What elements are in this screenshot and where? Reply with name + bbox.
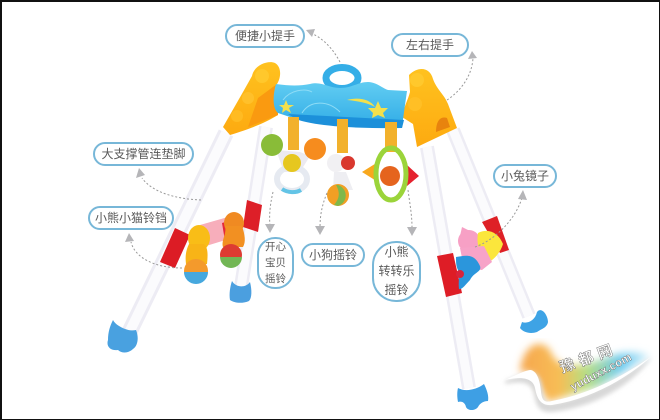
star left — [279, 100, 294, 113]
baby rattle toy — [261, 134, 326, 192]
arrow: left right handles — [447, 51, 477, 100]
label: convenient handle — [225, 24, 305, 48]
label: rabbit mirror: 小兔镜子 — [501, 168, 549, 182]
label: rabbit mirror — [493, 164, 557, 188]
arrow: convenient handle — [306, 29, 340, 62]
label: bear spinner rattle: 摇铃 — [384, 283, 408, 297]
bear and cat bell toys — [184, 212, 245, 284]
left front foot — [107, 320, 138, 353]
bar lower strip — [288, 114, 404, 128]
blue bar — [274, 82, 407, 128]
arrow: puppy rattle — [315, 193, 327, 235]
label: happy baby rattle — [257, 237, 294, 289]
handle — [326, 68, 358, 88]
rabbit mirror toy — [456, 227, 503, 289]
hanging straps — [288, 117, 397, 153]
right front foot — [457, 384, 488, 410]
label: happy baby rattle: 宝贝 — [265, 257, 286, 269]
left orange joint — [223, 62, 280, 135]
watermark text: 豫都网 — [558, 340, 620, 377]
label: happy baby rattle: 摇铃 — [265, 273, 286, 285]
label: left right handles — [391, 33, 469, 57]
label: puppy rattle: 小狗摇铃 — [309, 248, 357, 262]
red connector right front — [437, 253, 462, 297]
arrow: bear cat bells — [125, 233, 182, 268]
red connector left front — [160, 228, 190, 268]
bear spinner rattle toy — [362, 148, 419, 200]
right back foot — [520, 310, 548, 333]
arrow: bear spinner rattle — [407, 190, 417, 236]
label: bear cat bells — [88, 206, 174, 230]
arrow: rabbit mirror — [475, 190, 527, 247]
label: support tube foot pad — [93, 142, 194, 166]
label: bear spinner rattle: 小熊 — [384, 245, 408, 259]
label: happy baby rattle: 开心 — [265, 241, 286, 253]
label: bear spinner rattle: 转转乐 — [378, 264, 414, 278]
watermark ribbon — [505, 344, 652, 412]
arrow: happy baby rattle — [265, 192, 275, 233]
label: support tube foot pad: 大支撑管连垫脚 — [101, 146, 186, 160]
label: puppy rattle — [301, 243, 365, 267]
label: bear cat bells: 小熊小猫铃铛 — [95, 210, 167, 224]
red connector right back — [482, 216, 509, 253]
watermark text — [558, 340, 634, 394]
arrow: support tube — [136, 168, 201, 200]
watermark text: yuduxx.com — [569, 352, 634, 394]
cloud highlights — [283, 90, 340, 113]
label: left right handles: 左右提手 — [406, 38, 454, 52]
front legs — [128, 133, 469, 388]
right orange joint — [402, 69, 457, 147]
back legs — [241, 127, 529, 316]
label: bear spinner rattle — [372, 241, 421, 302]
label: convenient handle: 便捷小提手 — [235, 28, 295, 42]
shooting star — [347, 99, 388, 118]
left back foot — [230, 281, 251, 303]
puppy rattle toy — [327, 154, 355, 206]
red connector left back — [243, 200, 262, 232]
